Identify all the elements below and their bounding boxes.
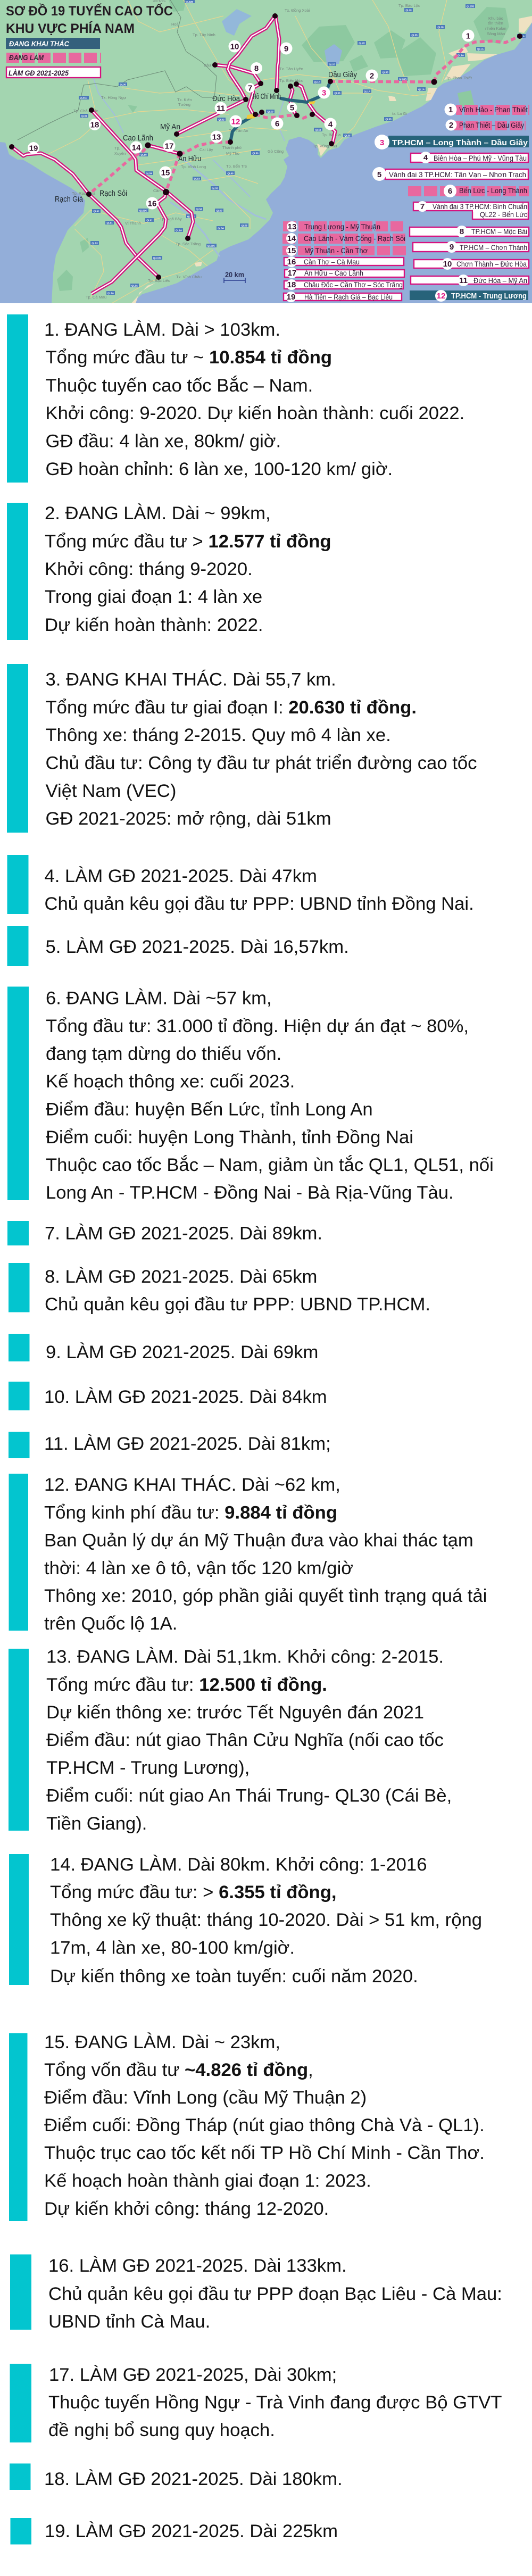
map place labels: Tp. Vũng Tàu [313,144,337,148]
map road shields: QL55B [399,78,407,81]
detail 11: 11. LÀM GĐ 2021-2025. Dài 81km; [44,1433,331,1454]
detail 13: 13. ĐANG LÀM. Dài 51,1km. Khởi công: 2-2015. [46,1647,444,1667]
detail 3: GĐ 2021-2025: mở rộng, dài 51km [46,809,331,829]
detail 14: 17m, 4 làn xe, 80-100 km/giờ. [50,1938,295,1958]
route name 2: Phan Thiết – Dầu Giây [459,121,524,129]
detail 14 [9,1854,482,1987]
route name 1: Vĩnh Hảo - Phan Thiết [459,106,528,114]
map place labels: Tp. [114,146,120,151]
detail 4: Chủ quản kêu gọi đầu tư PPP: UBND tỉnh Đồng Nai. [45,894,474,914]
route name 19 [284,292,402,302]
route 18 [92,110,193,238]
route name 11 [411,275,529,286]
map road shields: QL1A [314,81,321,83]
map place labels: Tx. Vĩnh Châu [176,275,202,279]
route number markers: 7 [248,84,252,93]
route 16 [92,192,166,294]
legend: đang khai thác: ĐANG KHAI THÁC [9,39,70,48]
map place labels: Thành phố [222,145,242,150]
map road shields: QL54 [196,207,202,211]
map road shields: QL53 [194,178,200,180]
detail 3: Thông xe: tháng 2-2015. Quy mô 4 làn xe. [46,725,391,745]
map road shields: QL63 [92,242,98,245]
route 3 [281,81,330,102]
route name 13 [283,221,403,232]
city labels [55,70,357,204]
route number markers [28,30,475,210]
route name 17: An Hữu – Cao Lãnh [304,269,363,277]
detail 1: GĐ đầu: 4 làn xe, 80km/ giờ. [46,431,281,451]
route name 17 [285,268,404,278]
detail 2: Dự kiến hoàn thành: 2022. [45,615,263,635]
detail 6: Điểm đầu: huyện Bến Lức, tỉnh Long An [46,1099,373,1119]
route name 3 [375,135,529,149]
map place labels: Tp. Biên Hòa [279,78,303,83]
route name 3: TP.HCM – Long Thành – Dầu Giây [392,138,528,147]
map lakes and rivers [93,9,342,256]
route name 17: 17 [288,269,296,278]
map road shields: QL20 [329,63,335,66]
detail 13: Điểm đầu: nút giao Thân Cửu Nghĩa (nối cao tốc [46,1730,444,1750]
route name 5: 5 [377,170,381,179]
detail 6: 6. ĐANG LÀM. Dài ~57 km, [46,987,272,1009]
map road shields: QL27B [467,5,475,7]
detail 15: Tổng vốn đầu tư ~4.826 tỉ đồng, [44,2060,313,2080]
map road shields: QL1A [518,35,525,37]
detail 6: Kế hoạch thông xe: cuối 2023. [46,1071,295,1092]
route name 7: QL22 - Bến Lức [480,211,527,219]
detail 14: 14. ĐANG LÀM. Dài 80km. Khởi công: 1-2016 [50,1854,427,1875]
map place labels: Tx. Kiến [177,97,192,102]
map place labels: Hoà [171,22,179,27]
map road shields: QL91 [81,115,87,117]
route number markers: 10 [230,43,239,51]
map place labels: Bàu [204,63,211,68]
map place labels: Sông Mào [487,31,505,36]
route name 4: Biên Hòa – Phú Mỹ - Vũng Tàu [434,154,527,162]
map place labels: Tp. Sóc Trăng [176,242,201,246]
map place labels: Tx. Đồng Xoài [285,8,310,13]
route name 11: 11 [459,276,468,285]
map place labels: Cai Lậy [200,147,213,152]
map place labels: tồn thiên [488,21,503,26]
detail 12: Thông xe: 2010, góp phần giải quyết tình trạng quá tải [44,1586,487,1606]
detail 6 [7,986,494,1203]
map road shields: QL61C [139,210,147,212]
detail 12: thời: 4 làn xe ô tô, vận tốc 120 km/giờ [44,1558,353,1578]
map road shields: QL1A [418,88,425,90]
detail 13: Điểm cuối: nút giao An Thái Trung- QL30 (Cái Bè, [46,1785,452,1806]
detail 11 [9,1432,331,1458]
route number markers: 15 [161,168,170,178]
route 12 [230,114,257,142]
map border line [18,0,217,140]
legend: làm giai đoạn 2021-2025 [6,67,101,78]
detail 12 [9,1474,487,1634]
detail 8: 8. LÀM GĐ 2021-2025. Dài 65km [45,1266,317,1287]
detail 19: 19. LÀM GĐ 2021-2025. Dài 225km [45,2521,338,2541]
detail 12: trên Quốc lộ 1A. [44,1614,177,1634]
map place labels: Tp. Cà Mau [86,295,106,300]
map road shields: QL61B [153,256,161,260]
map road shields: QL51 [315,129,321,131]
legend: đang làm [6,53,101,63]
route name 6: 6 [448,187,452,196]
detail 3 [7,664,477,833]
legend: làm giai đoạn 2021-2025: LÀM GĐ 2021-2025 [9,69,69,77]
detail 15: Thuộc trục cao tốc kết nối TP Hồ Chí Minh - Cần Thơ. [44,2143,485,2163]
map place labels: nhiên Kalon [485,26,506,31]
map place labels: Tp. Bến Tre [226,164,247,169]
detail 9 [9,1334,318,1362]
map road shields: QL50 [267,111,273,113]
route name 8: 8 [460,227,464,236]
map road shields: QL1A [477,48,484,50]
detail 3: 3. ĐANG KHAI THÁC. Dài 55,7 km. [46,669,336,689]
detail 18: 18. LÀM GĐ 2021-2025. Dài 180km. [44,2469,343,2489]
map road shields: QL20 [359,41,365,45]
map road shields: QL28 [437,26,444,29]
detail 13 [9,1647,452,1834]
map place labels: Xuyên [114,151,126,156]
route name 19: 19 [287,293,295,302]
detail 17: 17. LÀM GĐ 2021-2025, Dài 30km; [49,2364,337,2385]
route number markers: 6 [275,119,279,129]
interchange yellow mark [246,101,315,119]
map place labels: Tp. Tây Ninh [193,32,215,37]
route name 8: TP.HCM – Mộc Bài [471,228,527,236]
detail 6: Long An - TP.HCM - Đồng Nai - Bà Rịa-Vũng Tàu. [46,1183,454,1203]
detail 2: Trong giai đoạn 1: 4 làn xe [45,587,262,607]
route name 18: Châu Đốc – Cần Thơ – Sóc Trăng [304,281,403,289]
map road shields: QL61 [146,219,153,221]
detail 15: Kế hoạch hoàn thành giai đoạn 1: 2023. [44,2171,371,2191]
route 2 [330,81,434,82]
map place labels: Tp. Bạc Liêu [148,278,170,283]
detail 6: Tổng đầu tư: 31.000 tỉ đồng. Hiện dự án đạt ~ 80%, [46,1016,469,1036]
map place labels: Tp. Vĩnh Long [181,164,206,169]
detail 15 [9,2032,485,2221]
map place labels: Tp. Châu Đốc [73,109,98,113]
detail 9: 9. LÀM GĐ 2021-2025. Dài 69km [46,1342,318,1362]
map road shields: QL50 [252,152,259,154]
detail 8 [9,1263,430,1315]
map road shields: QL56 [334,92,340,95]
detail 16: UBND tỉnh Cà Mau. [48,2312,210,2332]
map road shields: QL54 [146,172,152,174]
map place labels: Tp. Rạch Giá [72,191,96,196]
city labels: Hồ Chí Minh [253,92,281,101]
detail 2 [7,503,331,640]
route name 7 [413,201,528,219]
detail 14: Tổng mức đầu tư: > 6.355 tỉ đồng, [50,1882,337,1902]
route name 14: Cao Lãnh - Vàm Cống - Rạch Sỏi [304,235,405,243]
route number markers: 17 [165,142,173,151]
route name 13: 13 [288,222,296,231]
map road shields: QL61 [93,210,99,213]
detail 8: Chủ quản kêu gọi đầu tư PPP: UBND TP.HCM. [45,1294,430,1315]
map road shields: QL91C [80,97,88,99]
map roads [48,0,447,303]
route name 2: 2 [449,121,453,130]
route number markers: 12 [231,117,240,127]
map road shields: QL20 [405,9,412,12]
route name 14 [282,233,405,244]
detail 1: Khởi công: 9-2020. Dự kiến hoàn thành: cuối 2022. [46,403,464,423]
detail 19 [11,2518,338,2545]
map place labels: Tp. Bà Rịa [322,132,341,137]
route 14 [92,146,148,192]
detail 6: Thuộc cao tốc Bắc – Nam, giảm ùn tắc QL1, QL51, nối [46,1154,494,1175]
route name 15: Mỹ Thuận - Cần Thơ [304,247,368,255]
map road shields: QL53 [212,187,218,189]
detail 2: Tổng mức đầu tư > 12.577 tỉ đồng [45,531,331,552]
map road shields: QL62 [218,118,225,121]
route number markers: 18 [90,120,99,130]
detail 16 [10,2255,502,2332]
map road shields: QL60 [216,210,222,212]
detail 3: Tổng mức đầu tư giai đoạn I: 20.630 tỉ đồng. [46,697,417,718]
route name 6: Bến Lức - Long Thành [459,187,527,195]
detail 14: Thông xe kỹ thuật: tháng 10-2020. Dài > 51 km, rộng [50,1910,482,1930]
detail 12: Ban Quản lý dự án Mỹ Thuận đưa vào khai thác tạm [44,1531,473,1551]
detail 1: GĐ hoàn chỉnh: 6 làn xe, 100-120 km/ giờ. [46,459,393,479]
detail 4 [7,855,474,914]
detail 5 [7,926,349,966]
map place labels: Tp. Bảo Lộc [398,3,420,8]
route name 12: 12 [437,292,445,301]
detail 18 [10,2463,343,2490]
route name 5 [372,167,528,181]
route name 15 [282,245,406,256]
route name 6 [408,185,529,197]
map place labels: Tường [178,102,190,107]
route name 18: 18 [287,280,296,289]
detail 15: Điểm cuối: Đồng Tháp (nút giao thông Chà Và - QL1). [44,2115,485,2135]
route number markers: 4 [328,120,333,129]
detail 2: 2. ĐANG LÀM. Dài ~ 99km, [45,503,271,523]
city labels: Rạch Giá [55,195,84,204]
map road shields: QL60 [227,172,234,174]
route number markers: 11 [217,104,225,113]
scale bar [224,270,245,283]
route name 16: Cần Thơ – Cà Mau [304,258,360,266]
map road shields: QL55 [385,118,392,120]
detail 17: đề nghị bổ sung quy hoạch. [48,2420,275,2440]
city labels: Mỹ An [160,122,180,131]
map road shields: QL1A [131,284,138,287]
route name 1 [445,103,529,116]
route name 4: 4 [423,153,428,162]
legend: đang làm: ĐANG LÀM [9,53,44,62]
map place labels: Khu bảo [488,16,503,21]
map road shields: QL91C [207,245,215,247]
route name 2 [446,119,526,131]
map place labels: Tx. Hồng Ngự [101,95,126,100]
detail 3: Việt Nam (VEC) [46,781,176,801]
detail 3: Chủ đầu tư: Công ty đầu tư phát triển đường cao tốc [46,753,477,774]
map place labels: Tp. Tân An [229,128,248,133]
map place labels [72,0,506,300]
title [6,3,173,36]
route 7 [249,84,261,113]
detail 17: Thuộc tuyến Hồng Ngự - Trà Vinh đang được Bộ GTVT [48,2392,502,2413]
route name 15: 15 [287,246,296,255]
route number markers: 2 [370,71,374,81]
route 4 [296,84,335,144]
detail 13: Dự kiến thông xe: trước Tết Nguyên đán 2021 [46,1702,424,1723]
map road shields: QL61 [106,221,113,225]
detail 1: Thuộc tuyến cao tốc Bắc – Nam. [46,375,313,396]
detail 6: đang tạm dừng do thiếu vốn. [46,1044,281,1064]
route number markers: 9 [284,45,288,53]
map road shields: QL1A [458,54,464,56]
route name 1: 1 [448,105,453,114]
route 8 [215,65,261,84]
route name 16: 16 [287,257,296,267]
map road shields: QL22B [186,1,194,3]
route name 9 [413,241,529,253]
route number markers: 13 [212,133,221,142]
route number markers: 1 [466,32,470,40]
route number markers: 19 [29,144,38,153]
detail 13: TP.HCM - Trung Lương), [46,1758,250,1778]
map place labels: tx. La Gi [392,111,407,116]
route number markers: 14 [132,144,141,152]
city labels: Dầu Giây [328,70,357,79]
map road shields: QL54 [218,227,224,230]
map place labels: Tp. Phan Thiết [446,76,472,80]
route name 3: 3 [380,138,384,147]
route name 5: Vành đai 3 TP.HCM: Tân Vạn – Nhơn Trạch [389,171,526,179]
route name 16 [284,256,404,267]
route 13 [180,142,230,154]
route number markers: 5 [290,103,294,113]
city labels: Đức Hòa [212,94,240,103]
detail 4: 4. LÀM GĐ 2021-2025. Dài 47km [45,866,317,886]
route number markers: 16 [148,199,156,209]
route number markers: 3 [322,88,326,98]
city labels: Rạch Sỏi [99,189,127,198]
map place labels: Tp. Ngã Bảy [160,217,182,221]
route name 10: Chơn Thành – Đức Hòa [456,260,527,268]
detail 13: Tiền Giang). [46,1814,147,1834]
route name 7: 7 [420,202,425,211]
map road shields: QL55 [411,34,418,36]
route 1 [434,36,520,82]
panel: map [0,0,532,303]
detail 1: 1. ĐANG LÀM. Dài > 103km. [44,319,280,340]
detail 12: 12. ĐANG KHAI THÁC. Dài ~62 km, [44,1474,340,1495]
route name 8 [410,226,529,237]
route 10 [228,16,275,99]
route name 10 [414,258,529,270]
map road shields: QL55 [382,71,388,73]
route name 11: Đức Hòa – Mỹ An [473,277,527,285]
map place labels: Gò Công [268,149,284,154]
map road shields: QL80 [140,153,147,156]
map road shields: QL1A [176,229,182,232]
map road shields [79,0,526,295]
detail 12: Tổng kinh phí đầu tư: 9.884 tỉ đồng [44,1502,337,1523]
detail 13: Tổng mức đầu tư: 12.500 tỉ đồng. [46,1675,327,1695]
detail 1: Tổng mức đầu tư ~ 10.854 tỉ đồng [46,347,332,368]
route name 14: 14 [287,234,296,243]
route 11 [177,99,246,134]
map road shields: QL1A [364,90,371,93]
map road shields: QL55 [344,134,351,137]
route name 4 [411,152,528,163]
route 17 [148,145,180,154]
map place labels: Cần [153,188,161,193]
map road shields: QL1A [107,292,114,295]
city labels: Cao Lãnh [123,134,153,143]
map road shields: QL54C [187,215,195,218]
detail 15: 15. ĐANG LÀM. Dài ~ 23km, [44,2032,280,2053]
route 5 [290,86,297,115]
route 6 [255,114,312,118]
detail 5: 5. LÀM GĐ 2021-2025. Dài 16,57km. [46,936,349,957]
route number markers: 8 [254,64,259,73]
route 19 [12,147,159,277]
scale bar: 20 km [225,270,244,279]
detail 7: 7. LÀM GĐ 2021-2025. Dài 89km. [45,1223,322,1244]
detail 10 [9,1382,327,1410]
route name 9: 9 [450,243,454,252]
map land [0,0,532,303]
title: SƠ ĐỒ 19 TUYẾN CAO TỐC [6,3,173,19]
title: KHU VỰC PHÍA NAM [6,21,135,36]
route 9 [276,16,279,90]
city labels: An Hữu [178,154,201,163]
map place labels: Vị Thanh [125,221,141,226]
route 15 [167,154,180,190]
map road shields: QL53 [241,225,247,227]
detail 1 [7,314,464,483]
detail 15: Dự kiến khởi công: tháng 12-2020. [44,2199,329,2219]
detail 14: Dự kiến thông xe toàn tuyến: cuối năm 2020. [50,1966,418,1987]
detail 16: Chủ quản kêu gọi đầu tư PPP đoạn Bạc Liêu - Cà Mau: [48,2284,502,2304]
route name 12 [410,290,528,302]
route name 13: Trung Lương - Mỹ Thuận [304,223,380,231]
detail 16: 16. LÀM GĐ 2021-2025. Dài 133km. [48,2255,347,2276]
route name 19: Hà Tiên – Rạch Giá – Bạc Liêu [304,293,393,301]
map place labels: Mỹ Tho [226,151,239,156]
detail 2: Khởi công: tháng 9-2020. [45,559,253,579]
detail 10: 10. LÀM GĐ 2021-2025. Dài 84km [44,1386,327,1407]
route name 18 [284,279,403,290]
route end dots [9,13,522,280]
map place labels: Tx. Tân Uyên [279,67,303,71]
detail 6: Điểm cuối: huyện Long Thành, tỉnh Đồng Nai [46,1127,413,1148]
detail 15: Điểm đầu: Vĩnh Long (cầu Mỹ Thuận 2) [44,2088,367,2108]
legend: đang khai thác [6,38,100,49]
map road shields: QL30 [120,83,126,86]
route name 10: 10 [443,260,452,269]
detail 17 [10,2364,502,2442]
